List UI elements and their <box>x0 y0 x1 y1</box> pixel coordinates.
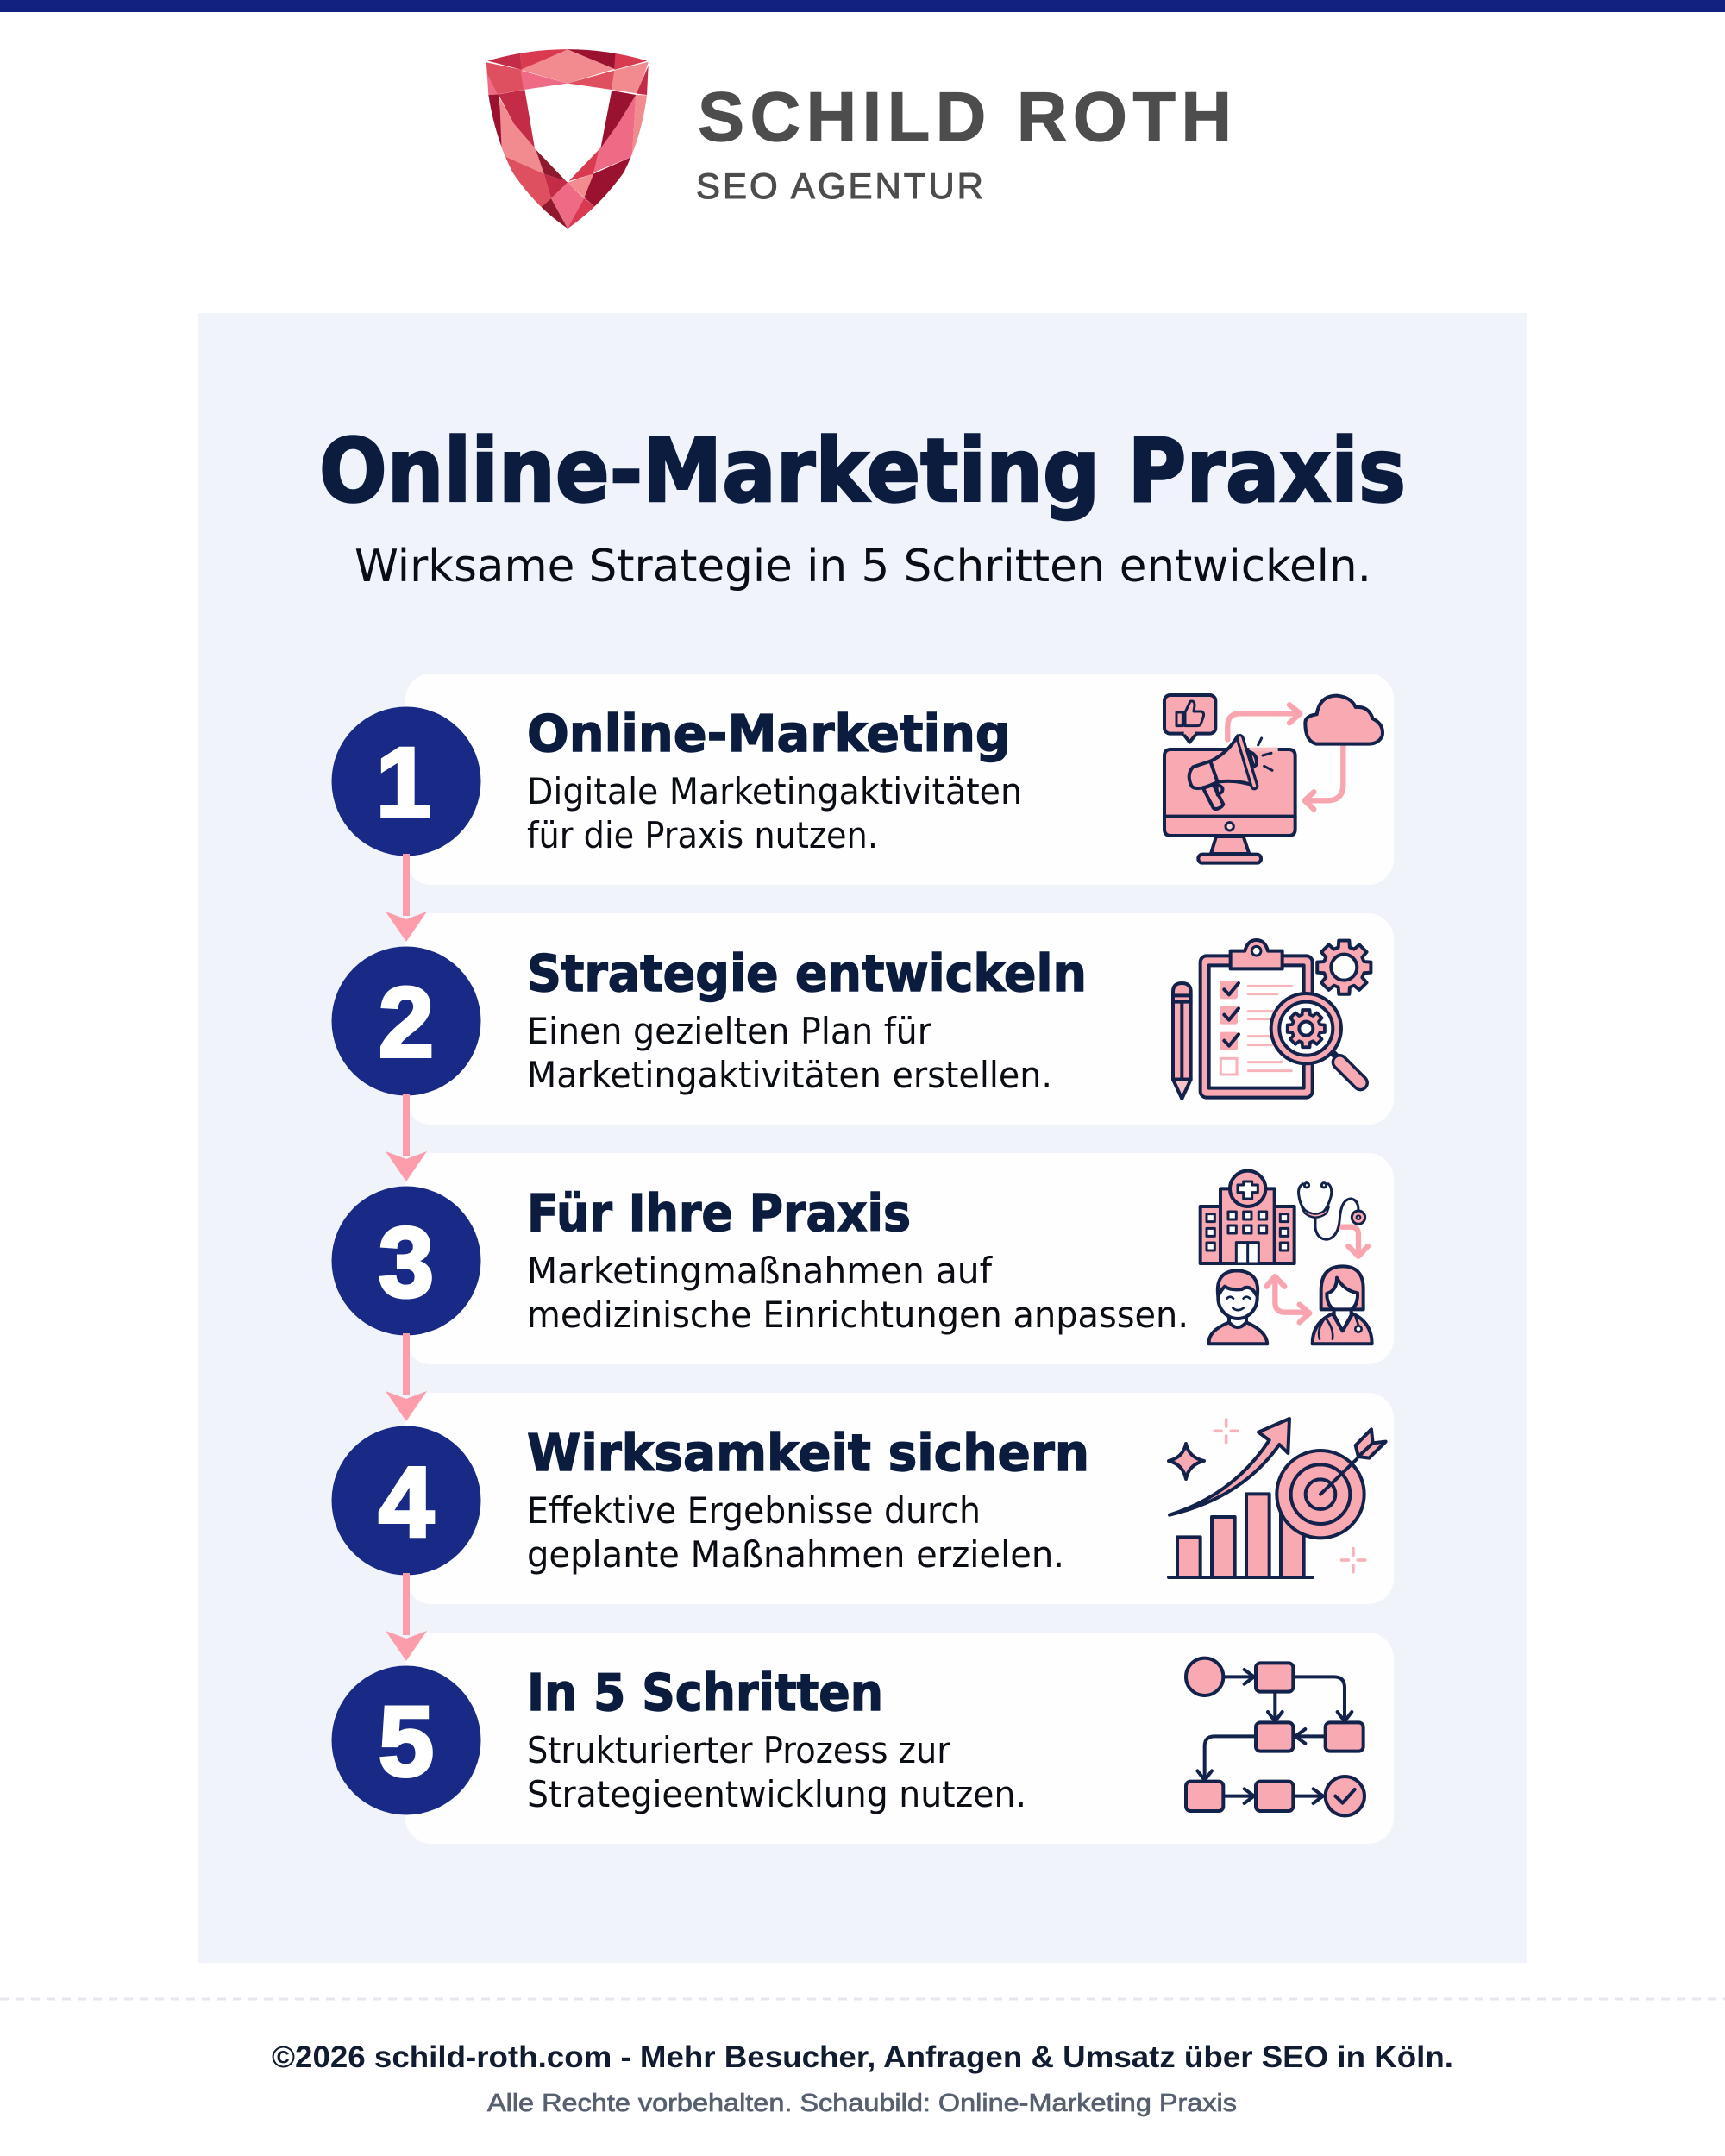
step 2 text: Marketingaktivitäten erstellen. <box>527 1054 1052 1096</box>
arrow: step 2 to 3 <box>386 1094 427 1181</box>
number badge 5: 5 <box>379 1687 434 1797</box>
step 3 heading: Für Ihre Praxis <box>527 1183 911 1243</box>
icon: process flowchart <box>1186 1658 1364 1815</box>
logo tagline: SEO AGENTUR <box>696 166 983 206</box>
step 3 <box>331 1153 1394 1364</box>
footer note: Alle Rechte vorbehalten. Schaubild: Online-Marketing Praxis <box>487 2090 1237 2117</box>
step 3 text: medizinische Einrichtungen anpassen. <box>527 1294 1189 1336</box>
icon: growth chart and target <box>1169 1419 1386 1577</box>
arrow: step 3 to 4 <box>386 1333 427 1421</box>
step 4 heading: Wirksamkeit sichern <box>527 1423 1089 1482</box>
number badge 1: 1 <box>376 728 431 838</box>
card 1 <box>405 674 1394 885</box>
arrow: step 1 to 2 <box>386 854 427 942</box>
number badge 3 <box>331 1187 481 1335</box>
step 4 text: Effektive Ergebnisse durch <box>527 1489 981 1532</box>
number badge 4 <box>331 1426 481 1575</box>
step 1 <box>331 674 1394 885</box>
step 2 heading: Strategie entwickeln <box>527 943 1087 1003</box>
number badge 5 <box>331 1666 481 1814</box>
step 5 <box>331 1633 1394 1844</box>
logo <box>480 43 1232 239</box>
card 3 <box>405 1153 1394 1364</box>
step 2 <box>331 913 1394 1125</box>
step 4 <box>331 1393 1394 1604</box>
step 2 text: Einen gezielten Plan für <box>527 1010 932 1052</box>
icon: shield logo <box>486 49 649 229</box>
subtitle: Wirksame Strategie in 5 Schritten entwickeln. <box>354 541 1371 592</box>
step 3 text: Marketingmaßnahmen auf <box>527 1250 993 1292</box>
footer copyright: ©2026 schild-roth.com - Mehr Besucher, Anfragen & Umsatz über SEO in Köln. <box>272 2040 1453 2074</box>
card 2 <box>405 913 1394 1125</box>
arrow: step 4 to 5 <box>386 1573 427 1661</box>
step 5 heading: In 5 Schritten <box>527 1663 883 1722</box>
step 5 text: Strategieentwicklung nutzen. <box>527 1773 1026 1815</box>
card 4 <box>405 1393 1394 1604</box>
panel: main background <box>198 313 1527 1963</box>
step 3 text <box>527 1250 1189 1336</box>
step 2 text <box>527 1010 1052 1096</box>
step 5 text: Strukturierter Prozess zur <box>527 1729 951 1771</box>
number badge 2 <box>331 947 481 1095</box>
number badge 1 <box>331 707 481 856</box>
icon: clipboard, pencil, gears and magnifier <box>1173 940 1371 1099</box>
top bar <box>0 0 1725 12</box>
title: Online-Marketing Praxis <box>319 420 1406 523</box>
number badge 4: 4 <box>379 1447 434 1557</box>
card 5 <box>405 1633 1394 1844</box>
step 1 text: für die Praxis nutzen. <box>527 814 878 856</box>
step 1 heading: Online-Marketing <box>527 704 1011 763</box>
number badge 2: 2 <box>379 968 434 1078</box>
step 4 text: geplante Maßnahmen erzielen. <box>527 1533 1064 1576</box>
icon: hospital, stethoscope, patient and doctor <box>1201 1171 1372 1344</box>
step 4 text <box>527 1489 1064 1576</box>
icon: monitor with megaphone, like bubble and cloud <box>1164 695 1383 863</box>
logo name: SCHILD ROTH <box>698 78 1232 156</box>
number badge 3: 3 <box>379 1207 434 1318</box>
step 1 text: Digitale Marketingaktivitäten <box>527 770 1022 812</box>
step 1 text <box>527 770 1022 856</box>
step 5 text <box>527 1729 1026 1815</box>
